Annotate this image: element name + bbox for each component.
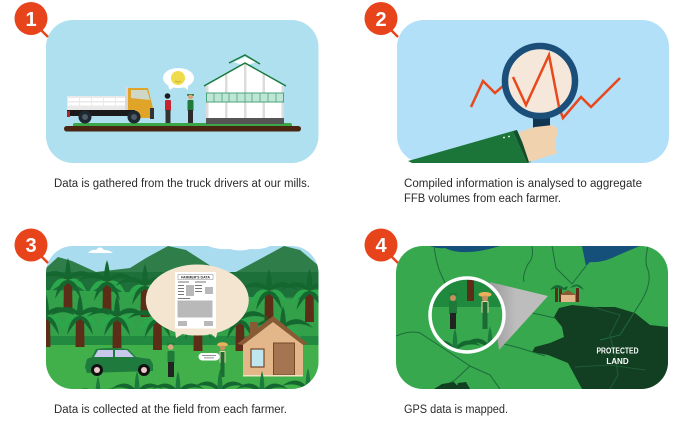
badge 1: 1 — [25, 9, 37, 31]
icon: farmhouse — [237, 316, 308, 376]
caption 2: FFB volumes from each farmer. — [404, 193, 561, 205]
mountains — [46, 246, 319, 300]
caption 2: Compiled information is analysed to aggregate — [404, 178, 642, 190]
sleeve — [408, 131, 527, 163]
panel 1 background — [46, 20, 318, 163]
hand — [519, 125, 558, 162]
caption 2 — [404, 178, 642, 205]
zoom lens — [429, 275, 516, 352]
badge 3 — [14, 228, 48, 263]
icon: truck — [67, 87, 154, 124]
field bands — [46, 272, 319, 389]
foreground palm sprouts — [82, 368, 310, 389]
rivers — [396, 246, 649, 389]
figure: field officer — [166, 343, 174, 377]
badge 2 — [364, 2, 398, 37]
document: farmer's data: FARMER'S DATA — [181, 276, 210, 280]
map background — [396, 246, 668, 389]
label: protected land: PROTECTED — [596, 346, 639, 356]
ground — [64, 123, 301, 132]
panel 4: GPS map — [396, 246, 668, 389]
badge 1 — [14, 2, 48, 37]
panel 3: field collection — [46, 246, 318, 389]
figure: farmer with straw hat — [217, 342, 228, 377]
icon: house and palms marker — [550, 284, 584, 302]
label: protected land — [596, 348, 638, 364]
line chart — [471, 55, 620, 118]
document: farmer's data — [175, 272, 216, 328]
icon: green car — [85, 348, 153, 376]
panel 1: truck drivers at the mill — [46, 20, 318, 163]
oil palm trees — [46, 258, 318, 351]
panel 2: analysing data — [397, 20, 669, 163]
small speech label — [198, 353, 220, 360]
figure: farmer in lens — [478, 292, 492, 329]
badge 4 — [364, 228, 398, 263]
water bodies — [430, 246, 640, 266]
icon: magnifying glass — [505, 46, 575, 131]
caption 1: Data is gathered from the truck drivers at our mills. — [54, 178, 310, 190]
callout cone — [490, 282, 548, 350]
badge 2: 2 — [375, 9, 387, 31]
sky — [46, 246, 319, 389]
label: protected land: LAND — [606, 357, 629, 366]
caption 4: GPS data is mapped. — [404, 404, 508, 416]
speech bubble — [146, 264, 249, 338]
figure: truck driver — [165, 93, 171, 123]
panel 2 background — [397, 20, 669, 163]
clouds — [88, 246, 270, 253]
figure: field officer — [187, 94, 194, 123]
badge 3: 3 — [25, 235, 37, 257]
caption 3: Data is collected at the field from each farmer. — [54, 404, 287, 416]
dark islands — [434, 382, 470, 389]
badge 4: 4 — [375, 235, 387, 257]
icon: mill building — [204, 55, 286, 124]
protected land — [532, 305, 668, 389]
cuff — [513, 130, 531, 163]
figure: officer in lens — [449, 293, 457, 329]
speech bubble with smiley — [163, 68, 194, 90]
